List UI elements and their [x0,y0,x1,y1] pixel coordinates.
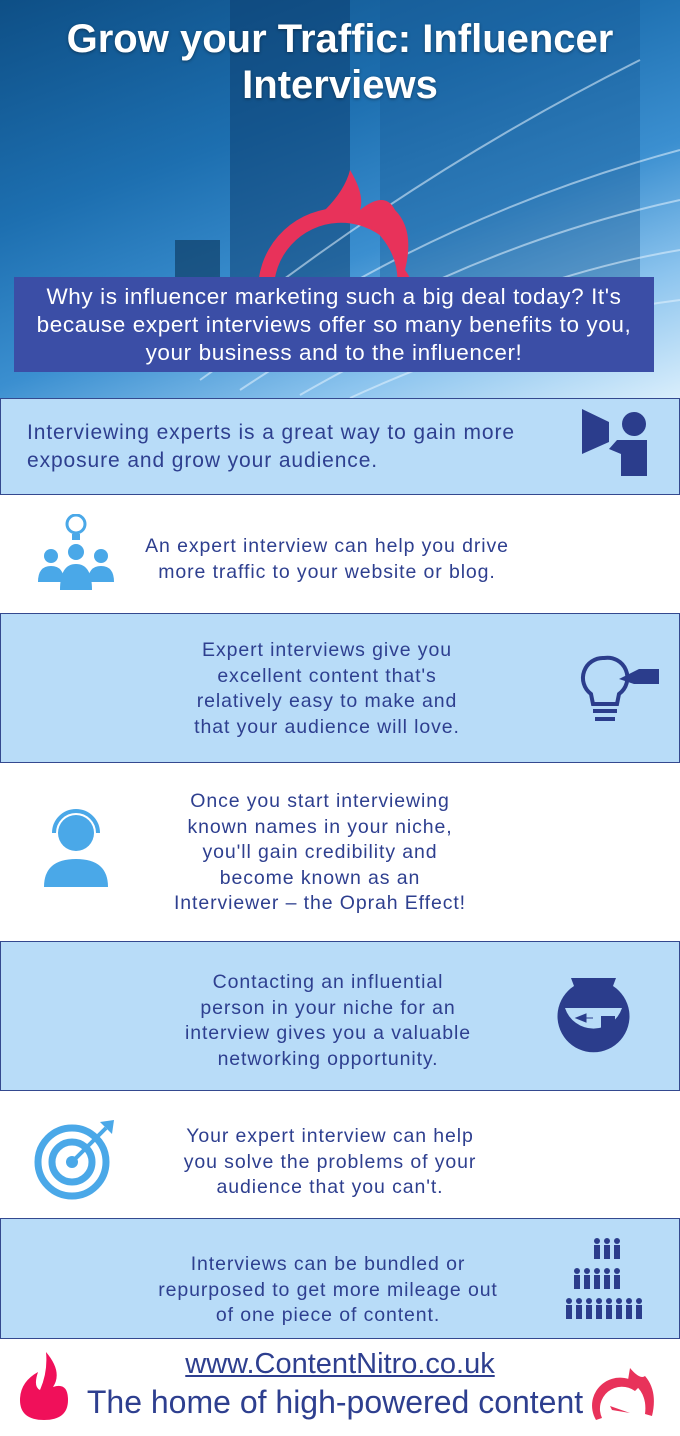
text: exposure: Interviewing experts is a great way to gain more [27,421,515,444]
icon: headset person [44,809,108,887]
icon: speedometer logo small [592,1368,654,1420]
text: networking: Contacting an influential [213,971,443,993]
icon: people pyramid [566,1238,642,1319]
panel: problems [34,1120,476,1200]
icon: speedometer flame logo [259,170,410,277]
icon: flame [20,1352,68,1420]
text: credibility: Once you start interviewing [190,790,450,812]
text: content [194,639,460,738]
intro callout: Why is influencer marketing such a big deal today? It's [46,284,622,309]
footer link: www.ContentNitro.co.uk [185,1348,495,1380]
panel: traffic [38,514,509,590]
text: traffic: An expert interview can help you drive [145,535,509,557]
text: credibility [174,790,466,914]
header background [0,0,680,398]
text: content: that your audience will love. [194,716,460,738]
icon: fishbowl [558,978,630,1052]
text: problems: audience that you can't. [217,1176,443,1198]
text: content: relatively easy to make and [197,690,457,712]
intro callout: your business and to the influencer! [146,340,522,365]
text: networking: interview gives you a valuable [185,1022,471,1044]
text: content: excellent content that's [217,664,437,686]
text: repurpose: Interviews can be bundled or [191,1253,465,1275]
icon: target [34,1120,114,1200]
panel: exposure [0,398,680,495]
panel: credibility [44,790,466,914]
text: networking: networking opportunity. [218,1048,438,1070]
panel: repurpose [0,1218,680,1339]
icon: megaphone person [582,409,647,476]
text: credibility: known names in your niche, [187,816,453,838]
text: networking [185,971,471,1070]
title [66,17,614,107]
text: problems: you solve the problems of your [184,1150,476,1172]
icon: team with lightbulb [38,514,114,590]
panel: content [0,613,680,763]
text: content: Expert interviews give you [202,639,452,661]
footer tagline: The home of high-powered content [87,1384,583,1420]
text: traffic: more traffic to your website or blog. [158,560,496,582]
text: problems [184,1125,476,1198]
text: exposure: exposure and grow your audience. [27,449,378,472]
text: problems: Your expert interview can help [186,1125,474,1147]
title: Interviews [242,63,438,107]
text: credibility: become known as an [220,866,420,888]
text: credibility: you'll gain credibility and [202,841,438,863]
panel: networking [0,941,680,1091]
intro callout: because expert interviews offer so many benefits to you, [37,312,631,337]
text: exposure [27,421,515,472]
text: networking: person in your niche for an [200,996,456,1018]
intro callout [14,277,654,372]
title: Grow your Traffic: Influencer [67,17,613,61]
icon: lightbulb [580,656,659,721]
text: credibility: Interviewer – the Oprah Effect! [174,892,466,914]
footer [20,1348,654,1420]
text: traffic [145,535,509,582]
text: repurpose: of one piece of content. [216,1304,440,1326]
text: repurpose: repurposed to get more mileage out [158,1278,498,1300]
text: repurpose [158,1253,498,1326]
